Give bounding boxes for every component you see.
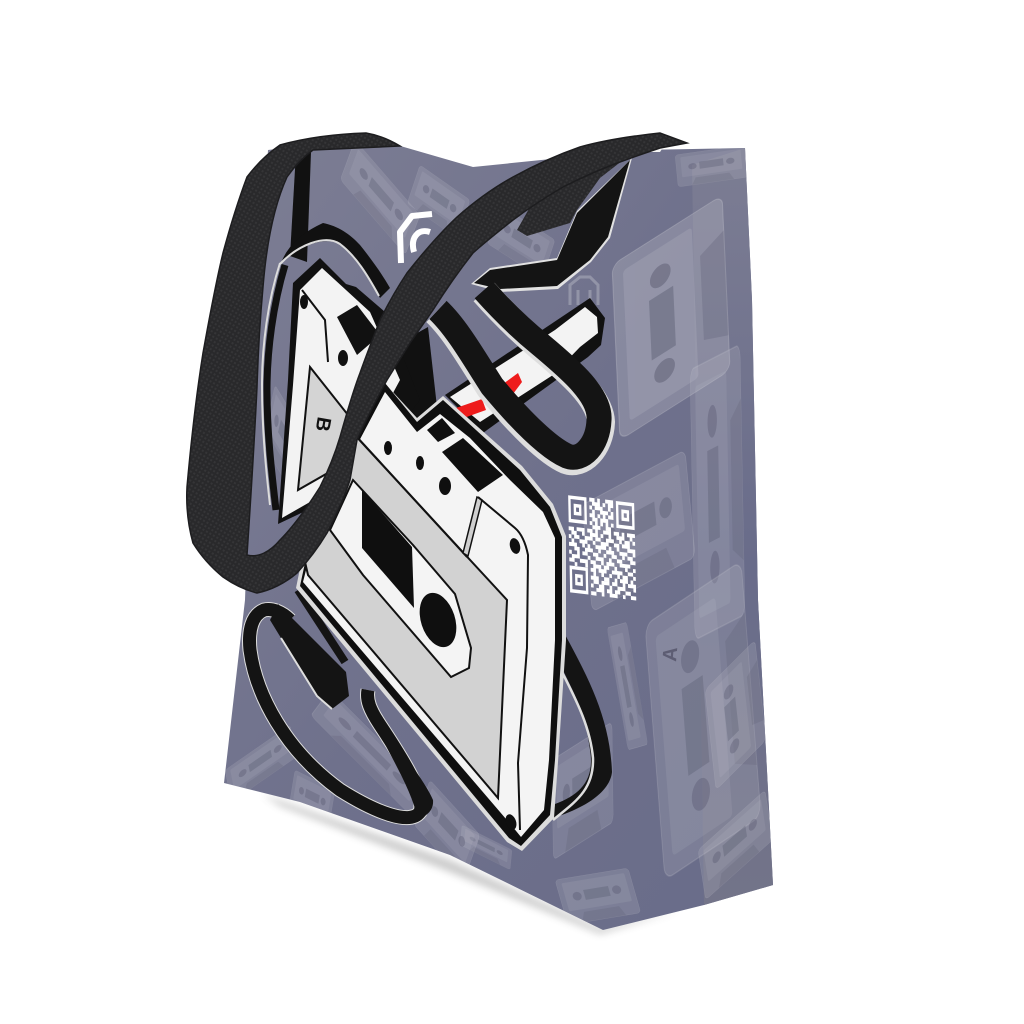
lower left tape ribbon [250, 590, 433, 820]
loop ribbon edge [436, 292, 601, 461]
ribbon thick lobe [270, 604, 349, 709]
ribbon segment under the handle [387, 327, 437, 420]
background cassette pattern [225, 140, 773, 925]
rear cassette outline [278, 258, 420, 524]
crescent white line [553, 672, 593, 820]
ribbon edge [250, 609, 421, 818]
rear cassette grey label [298, 367, 352, 490]
QR code [568, 497, 636, 599]
ground shadow [262, 794, 680, 934]
loop ribbon [438, 290, 599, 457]
red tape mark upper [503, 373, 522, 394]
bag body [224, 143, 773, 930]
rear cassette black slot [337, 305, 380, 355]
rear cassette crease line [302, 290, 328, 362]
grey label area [300, 432, 507, 798]
bag side gusset [692, 148, 773, 905]
white band with dots [365, 400, 477, 553]
corner dots [504, 537, 522, 831]
spool hole [413, 588, 463, 652]
dark vertical ribbon at top [290, 152, 311, 262]
strip along cassette edge [298, 590, 345, 662]
tote bag product illustration [186, 132, 773, 936]
rear cassette side letter: B [311, 415, 335, 433]
cassette white body [303, 392, 555, 837]
QR finder patterns [569, 497, 635, 598]
right tape ribbon under cassette [553, 631, 612, 820]
left tape ribbon behind cassette [262, 152, 390, 510]
band dots [384, 441, 451, 495]
lobe white edge [281, 638, 332, 709]
tape window [362, 490, 414, 608]
crescent ribbon [553, 631, 612, 818]
cassette black outline [300, 383, 562, 846]
band lower line [357, 437, 467, 557]
bag handles [187, 133, 687, 593]
stick outline [445, 298, 605, 433]
front cassette side A [296, 378, 566, 851]
large black square [442, 438, 503, 492]
ribbon black [250, 609, 421, 818]
pattern letter: A [659, 646, 682, 662]
white logo mark [400, 214, 432, 263]
ribbon wide top polygon [474, 160, 630, 289]
rear cassette white body [282, 268, 400, 518]
fold strip [463, 497, 482, 556]
left ribbon black band [267, 265, 285, 510]
bag front panel [224, 143, 773, 930]
arched ribbon white line [280, 240, 379, 296]
ribbon wide top edge [471, 158, 632, 292]
QR data modules [568, 497, 636, 599]
rear cassette dots [300, 295, 348, 366]
arched ribbon black band [281, 223, 390, 298]
pull-out tape stick [445, 298, 605, 433]
top right body line [478, 497, 528, 830]
faint logo on bag [570, 277, 598, 305]
left ribbon white line [262, 263, 280, 505]
rear cassette side B [278, 258, 420, 524]
red tape mark lower [456, 399, 486, 419]
cassette light halo [296, 378, 566, 851]
small black square [427, 418, 455, 442]
white pill panel [330, 480, 471, 677]
rear strap attachment [517, 157, 627, 236]
ribbon thick lobe lower [362, 692, 433, 820]
stick white body [450, 307, 598, 422]
upper tape ribbon loop [436, 158, 632, 461]
front strap loop [187, 133, 687, 593]
white inner lining sliver [640, 146, 664, 152]
